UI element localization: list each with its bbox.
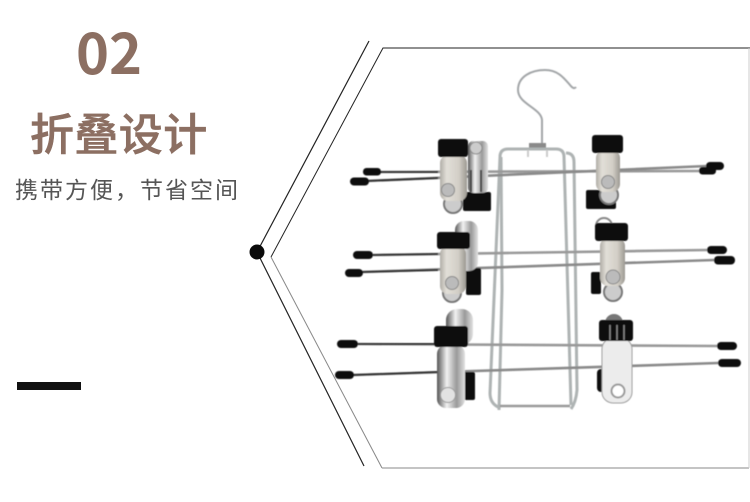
tier 2 rods xyxy=(345,246,735,277)
tier 1 rods xyxy=(350,162,724,186)
junction dot xyxy=(250,244,264,260)
decorative black bar xyxy=(17,382,81,390)
hanger hook xyxy=(518,70,576,148)
heading: 折叠设计 xyxy=(30,99,208,163)
section number: 02 xyxy=(76,10,142,91)
clip: middle right xyxy=(591,218,628,301)
inner hexagon frame xyxy=(271,48,750,468)
clip: bottom left xyxy=(434,309,475,408)
clip: top left xyxy=(438,139,491,213)
clip: middle left xyxy=(437,221,481,302)
outer hexagon line xyxy=(257,41,369,466)
clip: bottom right xyxy=(597,314,633,403)
description text: 携带方便，节省空间 xyxy=(15,171,240,205)
hanger wire frame xyxy=(490,149,577,410)
clip: top right xyxy=(586,135,623,209)
hanger product xyxy=(335,70,741,410)
tier 3 rods xyxy=(335,340,741,379)
